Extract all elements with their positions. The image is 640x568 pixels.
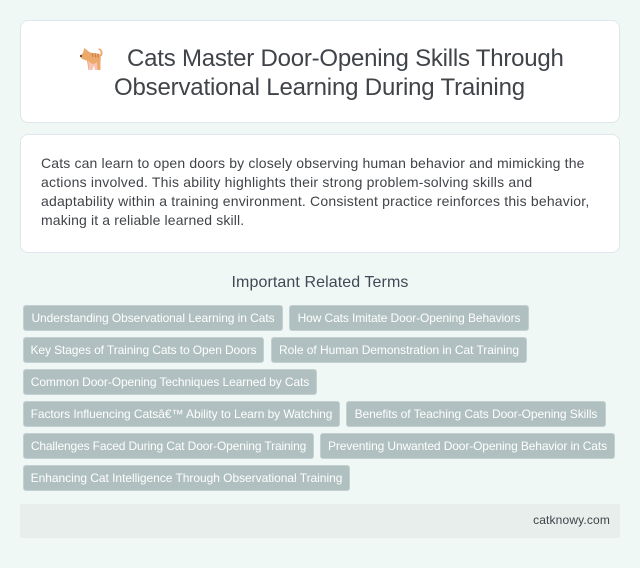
title text: Cats Master Door-Opening Skills Through [127,45,564,72]
description text: actions involved. This ability highlights their strong problem-solving skills and [41,174,532,190]
tag [23,433,314,459]
tag: Preventing Unwanted Door-Opening Behavior in Cats [328,439,607,453]
heading: important related terms: Important Related Terms [232,274,408,291]
tag [23,369,317,395]
description text [41,155,589,228]
tag: Challenges Faced During Cat Door-Opening Training [31,439,306,453]
tag: Key Stages of Training Cats to Open Doors [30,343,257,357]
panel: description [20,134,620,253]
title text: Observational Learning During Training [114,74,525,101]
tag [23,305,283,331]
description text: Cats can learn to open doors by closely observing human behavior and mimicking the [41,155,585,171]
tag list [23,305,615,491]
tag: Factors Influencing Catsâ€™ Ability to Learn by Watching [31,407,332,421]
title text [114,45,564,101]
tag [271,337,527,363]
tag: Enhancing Cat Intelligence Through Observational Training [31,471,342,485]
tag [320,433,615,459]
tag: Understanding Observational Learning in Cats [31,311,275,325]
tag [289,305,529,331]
panel: title [20,20,620,123]
footer text: site name: catknowy.com [533,513,610,527]
description text: adaptability within a training environment. Consistent practice reinforces this behavior, [41,193,589,209]
description text: making it a reliable learned skill. [41,212,244,228]
tag: How Cats Imitate Door-Opening Behaviors [298,311,520,325]
icon: orange cat [80,48,103,70]
tag [23,465,350,491]
tag [346,401,606,427]
tag: Role of Human Demonstration in Cat Training [279,343,519,357]
tag [23,401,340,427]
tag: Benefits of Teaching Cats Door-Opening Skills [355,407,597,421]
tag [23,337,264,363]
footer bar [20,504,620,538]
tag: Common Door-Opening Techniques Learned by Cats [31,375,309,389]
